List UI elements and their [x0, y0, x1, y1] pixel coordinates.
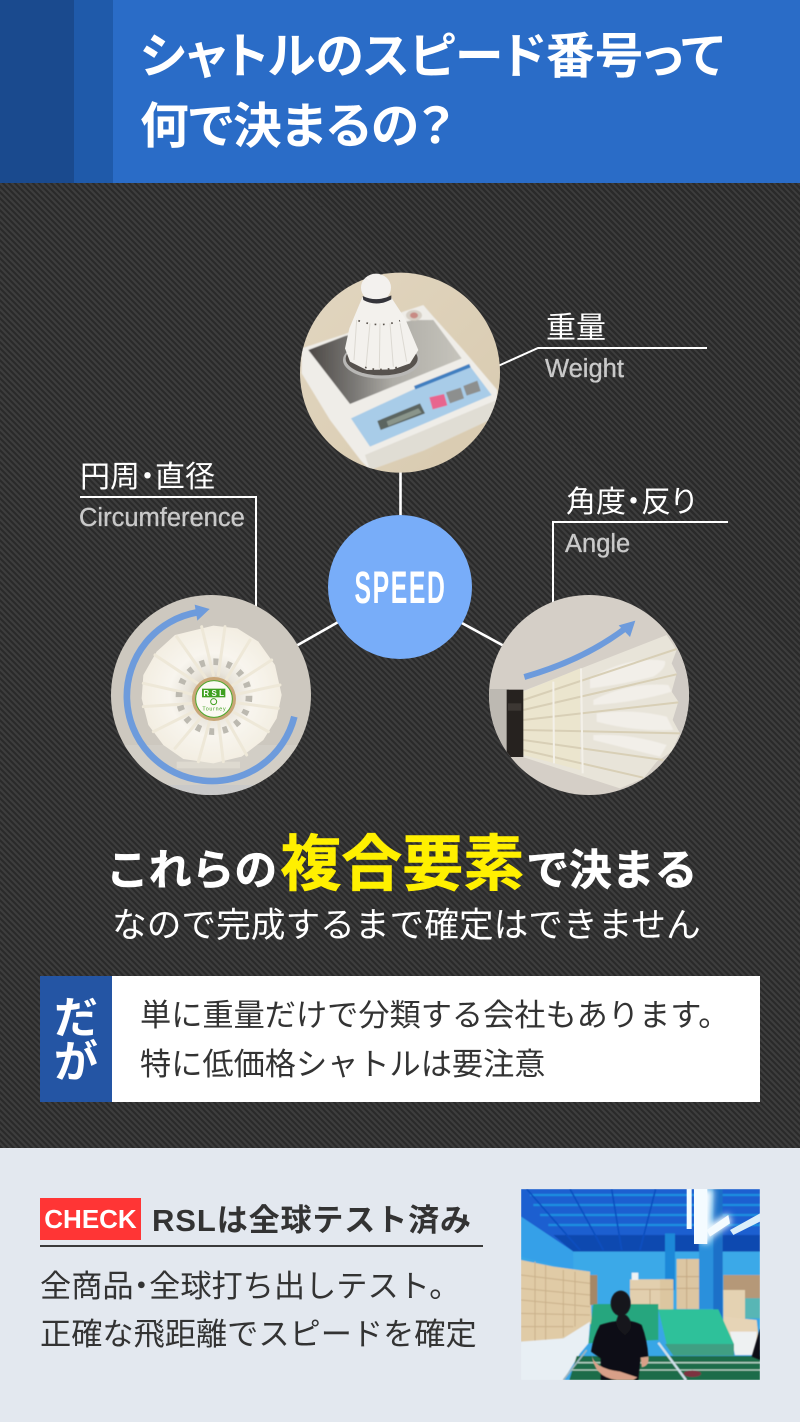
- subheading: なので完成するまで確定はできません: [112, 907, 701, 945]
- check text: 正確な飛距離でスピードを確定: [40, 1317, 477, 1352]
- panel: check: [0, 1148, 800, 1422]
- panel: speed factors: [0, 183, 800, 1148]
- title: シャトルのスピード番号って: [140, 30, 724, 84]
- callout label: が: [54, 1038, 98, 1087]
- callout: however: [40, 976, 760, 1102]
- title: [140, 30, 724, 154]
- title: 何で決まるの？: [140, 100, 453, 154]
- badge: SPEED: SPEED: [354, 562, 447, 613]
- leader: circumference: [80, 497, 256, 608]
- photo: shuttle from front: [110, 595, 311, 798]
- label: angle english: Angle: [565, 530, 630, 558]
- diagram: speed factors: [80, 272, 728, 795]
- check text: [40, 1269, 477, 1352]
- walls: [521, 1217, 573, 1270]
- boxes center: [630, 1279, 672, 1309]
- leader: weight: [498, 348, 707, 366]
- header mid band: [74, 0, 113, 183]
- callout text: [140, 998, 729, 1082]
- leader: angle: [553, 522, 728, 604]
- label: circumference english: Circumference: [79, 504, 245, 532]
- boxes right: [723, 1275, 760, 1298]
- badge: SPEED: [328, 515, 472, 659]
- callout label: だ: [54, 994, 98, 1043]
- logo: RSL Tourney: Tourney: [202, 706, 226, 712]
- panel: header: [0, 0, 800, 183]
- check heading: RSLは全球テスト済み: [152, 1203, 472, 1238]
- check badge: CHECK: [44, 1204, 137, 1234]
- lights: [687, 1189, 760, 1244]
- check rule: [40, 1245, 483, 1247]
- photo: warehouse test: [521, 1189, 760, 1380]
- label: angle: 角度・反り: [566, 486, 696, 519]
- photo: shuttle from side: [489, 595, 693, 795]
- header dark band: [0, 0, 74, 183]
- label: weight english: Weight: [545, 355, 624, 383]
- person: [591, 1291, 760, 1380]
- ceiling: [521, 1189, 760, 1252]
- photo: shuttle on scale: [300, 273, 500, 473]
- callout label: [40, 976, 112, 1102]
- callout text: 特に低価格シャトルは要注意: [140, 1046, 545, 1082]
- check badge: [40, 1198, 141, 1240]
- callout text: 単に重量だけで分類する会社もあります。: [140, 998, 729, 1033]
- floor: [521, 1322, 590, 1380]
- label: circumference: 円周・直径: [80, 461, 215, 494]
- logo: RSL Tourney: [196, 681, 232, 717]
- check text: 全商品・全球打ち出しテスト。: [40, 1269, 460, 1304]
- label: weight: 重量: [546, 312, 606, 345]
- heading: conclusion: これらの複合要素で決まる: [106, 830, 697, 898]
- nets and frames: [588, 1304, 658, 1343]
- logo: RSL Tourney: RSL: [203, 689, 224, 698]
- connector lines: [296, 470, 504, 646]
- arrow: angle: [524, 621, 635, 677]
- arrow: circumference: [127, 605, 294, 781]
- boxes left: [521, 1260, 592, 1342]
